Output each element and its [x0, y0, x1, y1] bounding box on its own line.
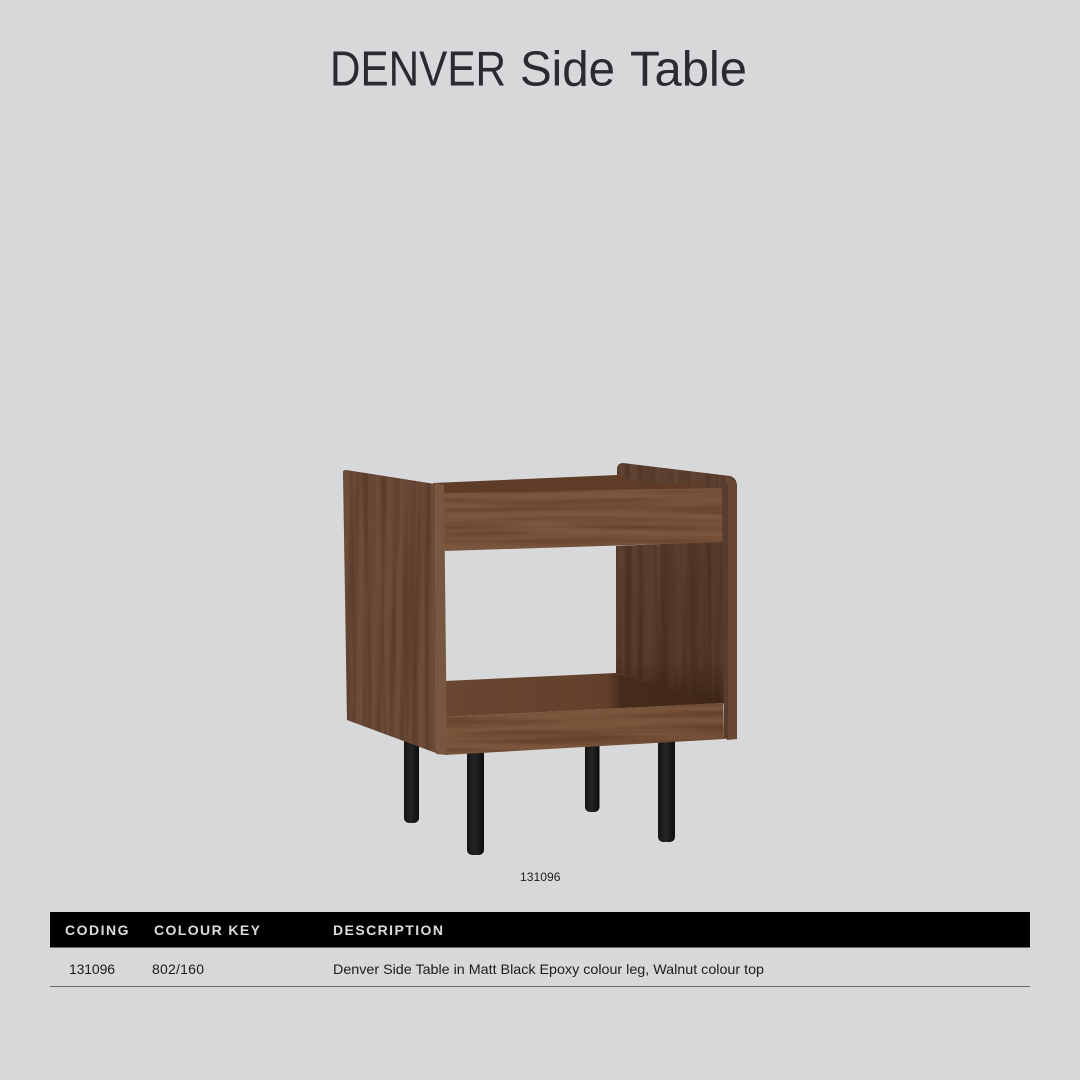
table header: [50, 912, 1030, 948]
tray surface: [433, 475, 722, 494]
table row: 802/160: [152, 961, 204, 977]
table header: DESCRIPTION: [333, 922, 443, 938]
drawer front: [443, 488, 728, 551]
left side panel: [343, 470, 436, 753]
right panel edge: [726, 477, 737, 740]
table legs: [404, 735, 675, 855]
product image: side table: [343, 463, 737, 855]
title: DENVER: [330, 42, 506, 96]
title: [330, 42, 747, 96]
table row: Denver Side Table in Matt Black Epoxy colour leg, Walnut colour top: [333, 961, 764, 977]
inner right panel: [616, 541, 729, 705]
specification table: [50, 912, 1030, 987]
table header: COLOUR KEY: [154, 922, 261, 938]
lower shelf surface: [445, 673, 724, 717]
table row: 131096: [69, 961, 115, 977]
lower shelf front: [445, 703, 724, 755]
back panel lip: [617, 463, 737, 520]
table header: CODING: [65, 922, 129, 938]
title: Side: [520, 42, 615, 96]
table row: [69, 961, 764, 977]
left front edge: [435, 483, 447, 755]
product code caption: 131096: [520, 870, 561, 884]
title: Table: [630, 42, 747, 96]
